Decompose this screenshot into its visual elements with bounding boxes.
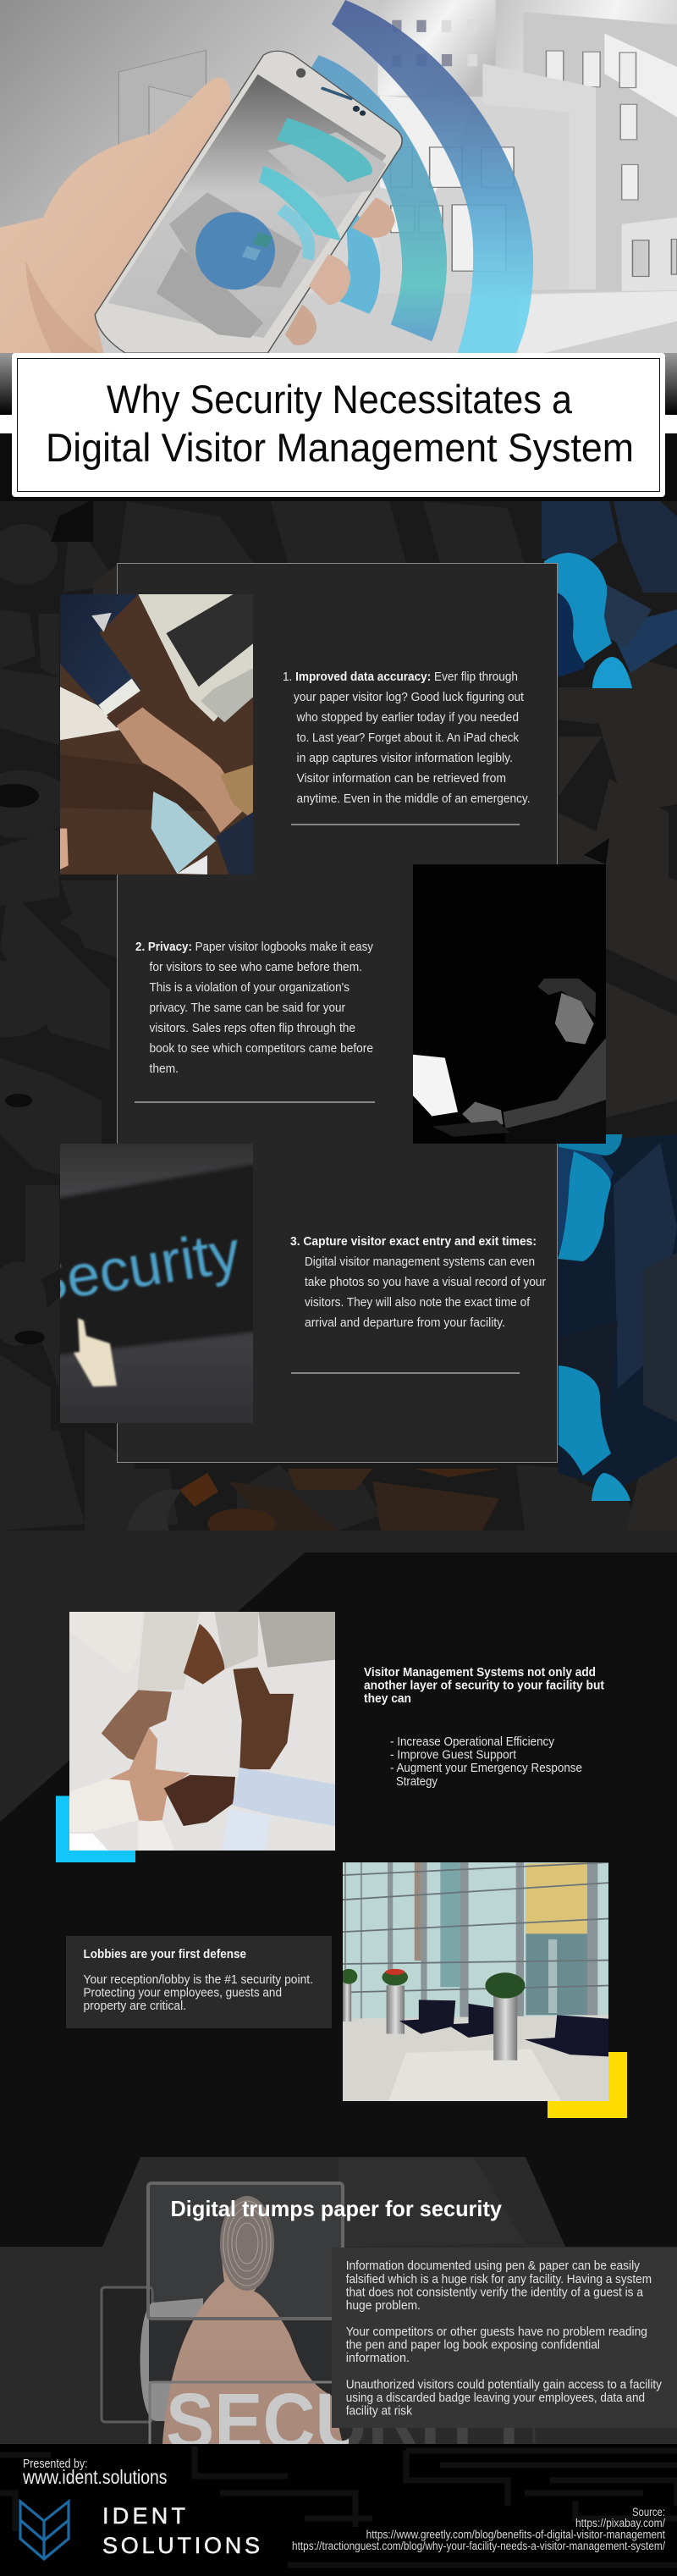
lobby body: Your reception/lobby is the #1 security point. — [83, 1973, 313, 1987]
text: capture entry and exit times: Digital visitor management systems can even — [305, 1255, 535, 1269]
lobby body — [83, 1973, 313, 2013]
lobby heading: Lobbies are your first defense — [83, 1948, 246, 1961]
thumb — [162, 2262, 342, 2444]
text: privacy: visitors. Sales reps often flip through the — [149, 1022, 355, 1035]
text: capture entry and exit times: take photos so you have a visual record of your — [305, 1276, 546, 1289]
side strips beneath hero — [0, 353, 677, 501]
brand name — [102, 2503, 260, 2558]
text: privacy: for visitors to see who came before them. — [149, 961, 362, 974]
text: capture entry and exit times: arrival and departure from your facility. — [305, 1316, 505, 1330]
benefits list: - Augment your Emergency Response — [390, 1762, 582, 1775]
text: privacy: 2. Privacy: Paper visitor logbooks make it easy — [135, 940, 374, 954]
panel: benefits card — [117, 564, 557, 1463]
accent: yellow corner — [548, 2052, 627, 2118]
photo: hacker at laptop — [413, 864, 606, 1144]
brand name: SOLUTIONS — [102, 2533, 260, 2558]
text: privacy: privacy. The same can be said for your — [149, 1001, 345, 1015]
text: capture entry and exit times: 3. Capture visitor exact entry and exit times: — [290, 1235, 537, 1249]
word SECURITY: SECURITY — [166, 2377, 533, 2467]
icon: Ident Solutions shield logo — [20, 2502, 69, 2559]
text: improved data accuracy: anytime. Even in the middle of an emergency. — [296, 792, 530, 806]
website: www.ident.solutions — [22, 2466, 167, 2488]
body paragraph 1: that does not consistently verify the identity of a guest is a — [346, 2286, 644, 2300]
text: privacy: book to see which competitors came before — [149, 1042, 373, 1056]
body paragraph 2: Your competitors or other guests have no problem reading — [346, 2325, 647, 2339]
body paragraph 1: falsified which is a huge risk for any facility. Having a system — [346, 2273, 652, 2286]
text: privacy — [135, 940, 374, 1076]
body paragraph 1: huge problem. — [346, 2299, 421, 2313]
lobby body: Protecting your employees, guests and — [83, 1987, 282, 2000]
hero illustration: hand holding phone with wifi — [0, 0, 677, 353]
photo: business handshake — [60, 594, 253, 874]
benefits list: Strategy — [396, 1775, 438, 1789]
body paragraph 3 — [346, 2379, 663, 2419]
text: improved data accuracy: who stopped by earlier today if you needed — [296, 711, 519, 725]
text: privacy: them. — [149, 1062, 179, 1076]
footer — [0, 2444, 677, 2576]
body paragraph 1 — [346, 2259, 652, 2313]
heading: another layer of security to your facility but — [364, 1680, 604, 1693]
dark diagonal header band — [0, 1531, 677, 1822]
text: visitor management systems — [364, 1666, 604, 1789]
text: improved data accuracy: to. Last year? Forget about it. An iPad check — [296, 731, 520, 745]
heading — [364, 1666, 604, 1706]
text: improved data accuracy: 1. Improved data accuracy: Ever flip through — [283, 670, 518, 684]
photo: glass lobby with chairs — [343, 1862, 608, 2101]
frame panels — [102, 2184, 343, 2422]
title line 2: Digital Visitor Management System — [46, 425, 634, 470]
benefits list — [390, 1735, 582, 1789]
heading: they can — [364, 1692, 411, 1706]
benefits list: - Increase Operational Efficiency — [390, 1735, 555, 1749]
panel: digital trumps paper text — [332, 2248, 677, 2444]
body paragraph 2: information. — [346, 2352, 410, 2365]
accent: blue corner — [56, 1796, 135, 1862]
text: improved data accuracy: your paper visitor log? Good luck figuring out — [294, 691, 524, 704]
text: capture entry and exit times — [290, 1235, 546, 1330]
presented by: Presented by: — [23, 2457, 88, 2471]
heading: Visitor Management Systems not only add — [364, 1666, 596, 1680]
body paragraph 3: Unauthorized visitors could potentially gain access to a facility — [346, 2379, 663, 2392]
body paragraph 1: Information documented using pen & paper can be easily — [346, 2259, 641, 2273]
text: improved data accuracy: in app captures visitor information legibly. — [296, 752, 513, 765]
heading: digital trumps paper: Digital trumps paper for security — [171, 2196, 503, 2221]
text: privacy: This is a violation of your organization's — [149, 981, 350, 995]
body paragraph 3: using a discarded badge leaving your employees, data and — [346, 2391, 645, 2405]
title box — [12, 353, 665, 497]
fingerprint — [220, 2196, 274, 2291]
text: improved data accuracy — [283, 670, 530, 806]
benefits list: - Improve Guest Support — [390, 1749, 516, 1762]
sources — [292, 2506, 665, 2552]
photo: security screen with cursor: Security — [23, 1218, 245, 1316]
background: dark 3D symbol pattern — [0, 499, 677, 1539]
body paragraph 2: the pen and paper log book exposing confidential — [346, 2339, 600, 2353]
panel: fingerprint security photo section — [0, 2157, 677, 2467]
brand name: IDENT — [102, 2503, 185, 2529]
photo: linked hands — [69, 1612, 335, 1851]
body paragraph 3: facility at risk — [346, 2405, 413, 2419]
photo: security screen with cursor — [23, 1144, 253, 1423]
lobby body: property are critical. — [83, 2000, 186, 2013]
text: capture entry and exit times: visitors. They will also note the exact time of — [305, 1296, 531, 1310]
panel: lobbies are your first defense — [66, 1936, 332, 2028]
title line 1: Why Security Necessitates a — [107, 377, 573, 422]
sources: Source: — [632, 2506, 665, 2518]
sources: https://pixabay.com/ — [575, 2517, 665, 2529]
text: improved data accuracy: Visitor information can be retrieved from — [296, 772, 506, 786]
body paragraph 2 — [346, 2325, 647, 2365]
